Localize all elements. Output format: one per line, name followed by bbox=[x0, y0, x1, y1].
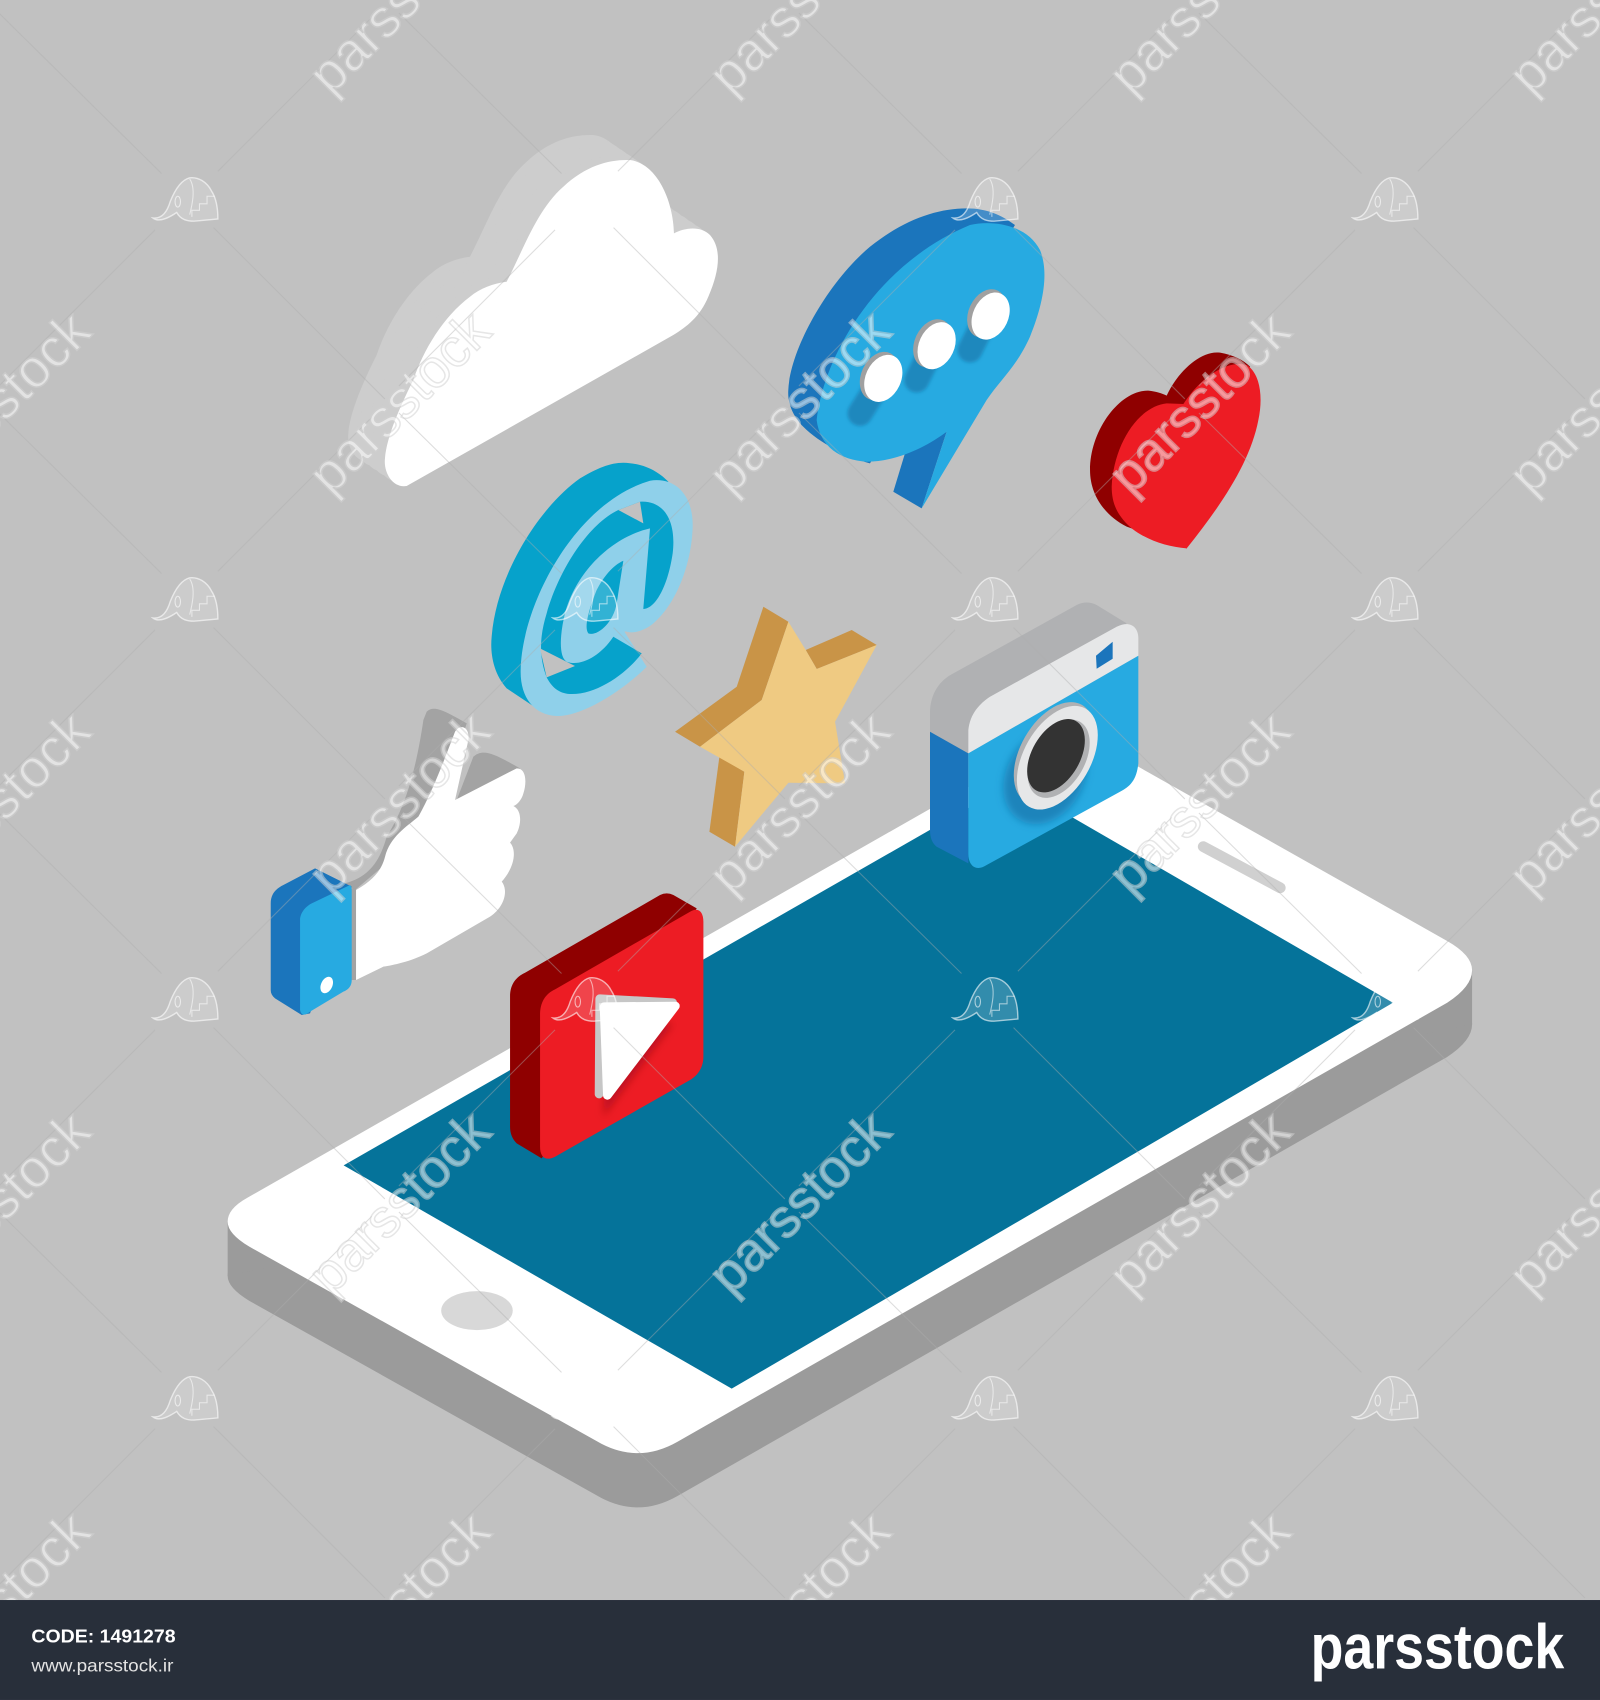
icon: thumbs up bbox=[271, 709, 525, 1015]
icon: chat bubble bbox=[788, 208, 1044, 508]
dots bbox=[852, 283, 1017, 408]
speaker slot bbox=[1203, 847, 1280, 888]
watermark text grid: parsstock bbox=[697, 700, 902, 905]
smartphone bbox=[228, 737, 1472, 1507]
icon: camera bbox=[930, 603, 1138, 868]
watermark text grid: parsstock bbox=[1097, 1500, 1302, 1700]
icon: heart bbox=[1090, 352, 1261, 548]
watermark text grid: parsstock bbox=[297, 1100, 502, 1305]
icon: star bbox=[675, 607, 877, 847]
lens bbox=[987, 688, 1115, 839]
watermark text grid: parsstock bbox=[297, 300, 502, 505]
footer bar bbox=[0, 1600, 1600, 1700]
brand logo: parsstock bbox=[1311, 1612, 1565, 1682]
watermark text grid: parsstock bbox=[1097, 700, 1302, 905]
phone top face bbox=[228, 737, 1472, 1453]
watermark text grid: parsstock bbox=[697, 1500, 902, 1700]
dot shadows bbox=[860, 323, 983, 413]
watermark text grid: parsstock bbox=[1097, 300, 1302, 505]
icon: video play bbox=[510, 893, 703, 1159]
play triangle bbox=[599, 999, 675, 1117]
watermark text grid: parsstock bbox=[697, 1100, 902, 1305]
home button bbox=[441, 1291, 513, 1330]
icon: at sign bbox=[491, 463, 693, 716]
cuff bbox=[271, 868, 352, 1015]
watermark text grid: parsstock bbox=[697, 300, 902, 505]
watermark text grid: parsstock bbox=[1097, 1100, 1302, 1305]
website: www.parsstock.ir bbox=[30, 1656, 174, 1676]
icon: cloud bbox=[348, 135, 718, 486]
image code: CODE: 1491278 bbox=[31, 1625, 176, 1646]
watermark text grid: parsstock bbox=[297, 1500, 502, 1700]
phone screen bbox=[344, 783, 1393, 1389]
watermark text grid: parsstock bbox=[297, 700, 502, 905]
phone side bbox=[228, 791, 1472, 1507]
viewfinder bbox=[1096, 642, 1113, 669]
